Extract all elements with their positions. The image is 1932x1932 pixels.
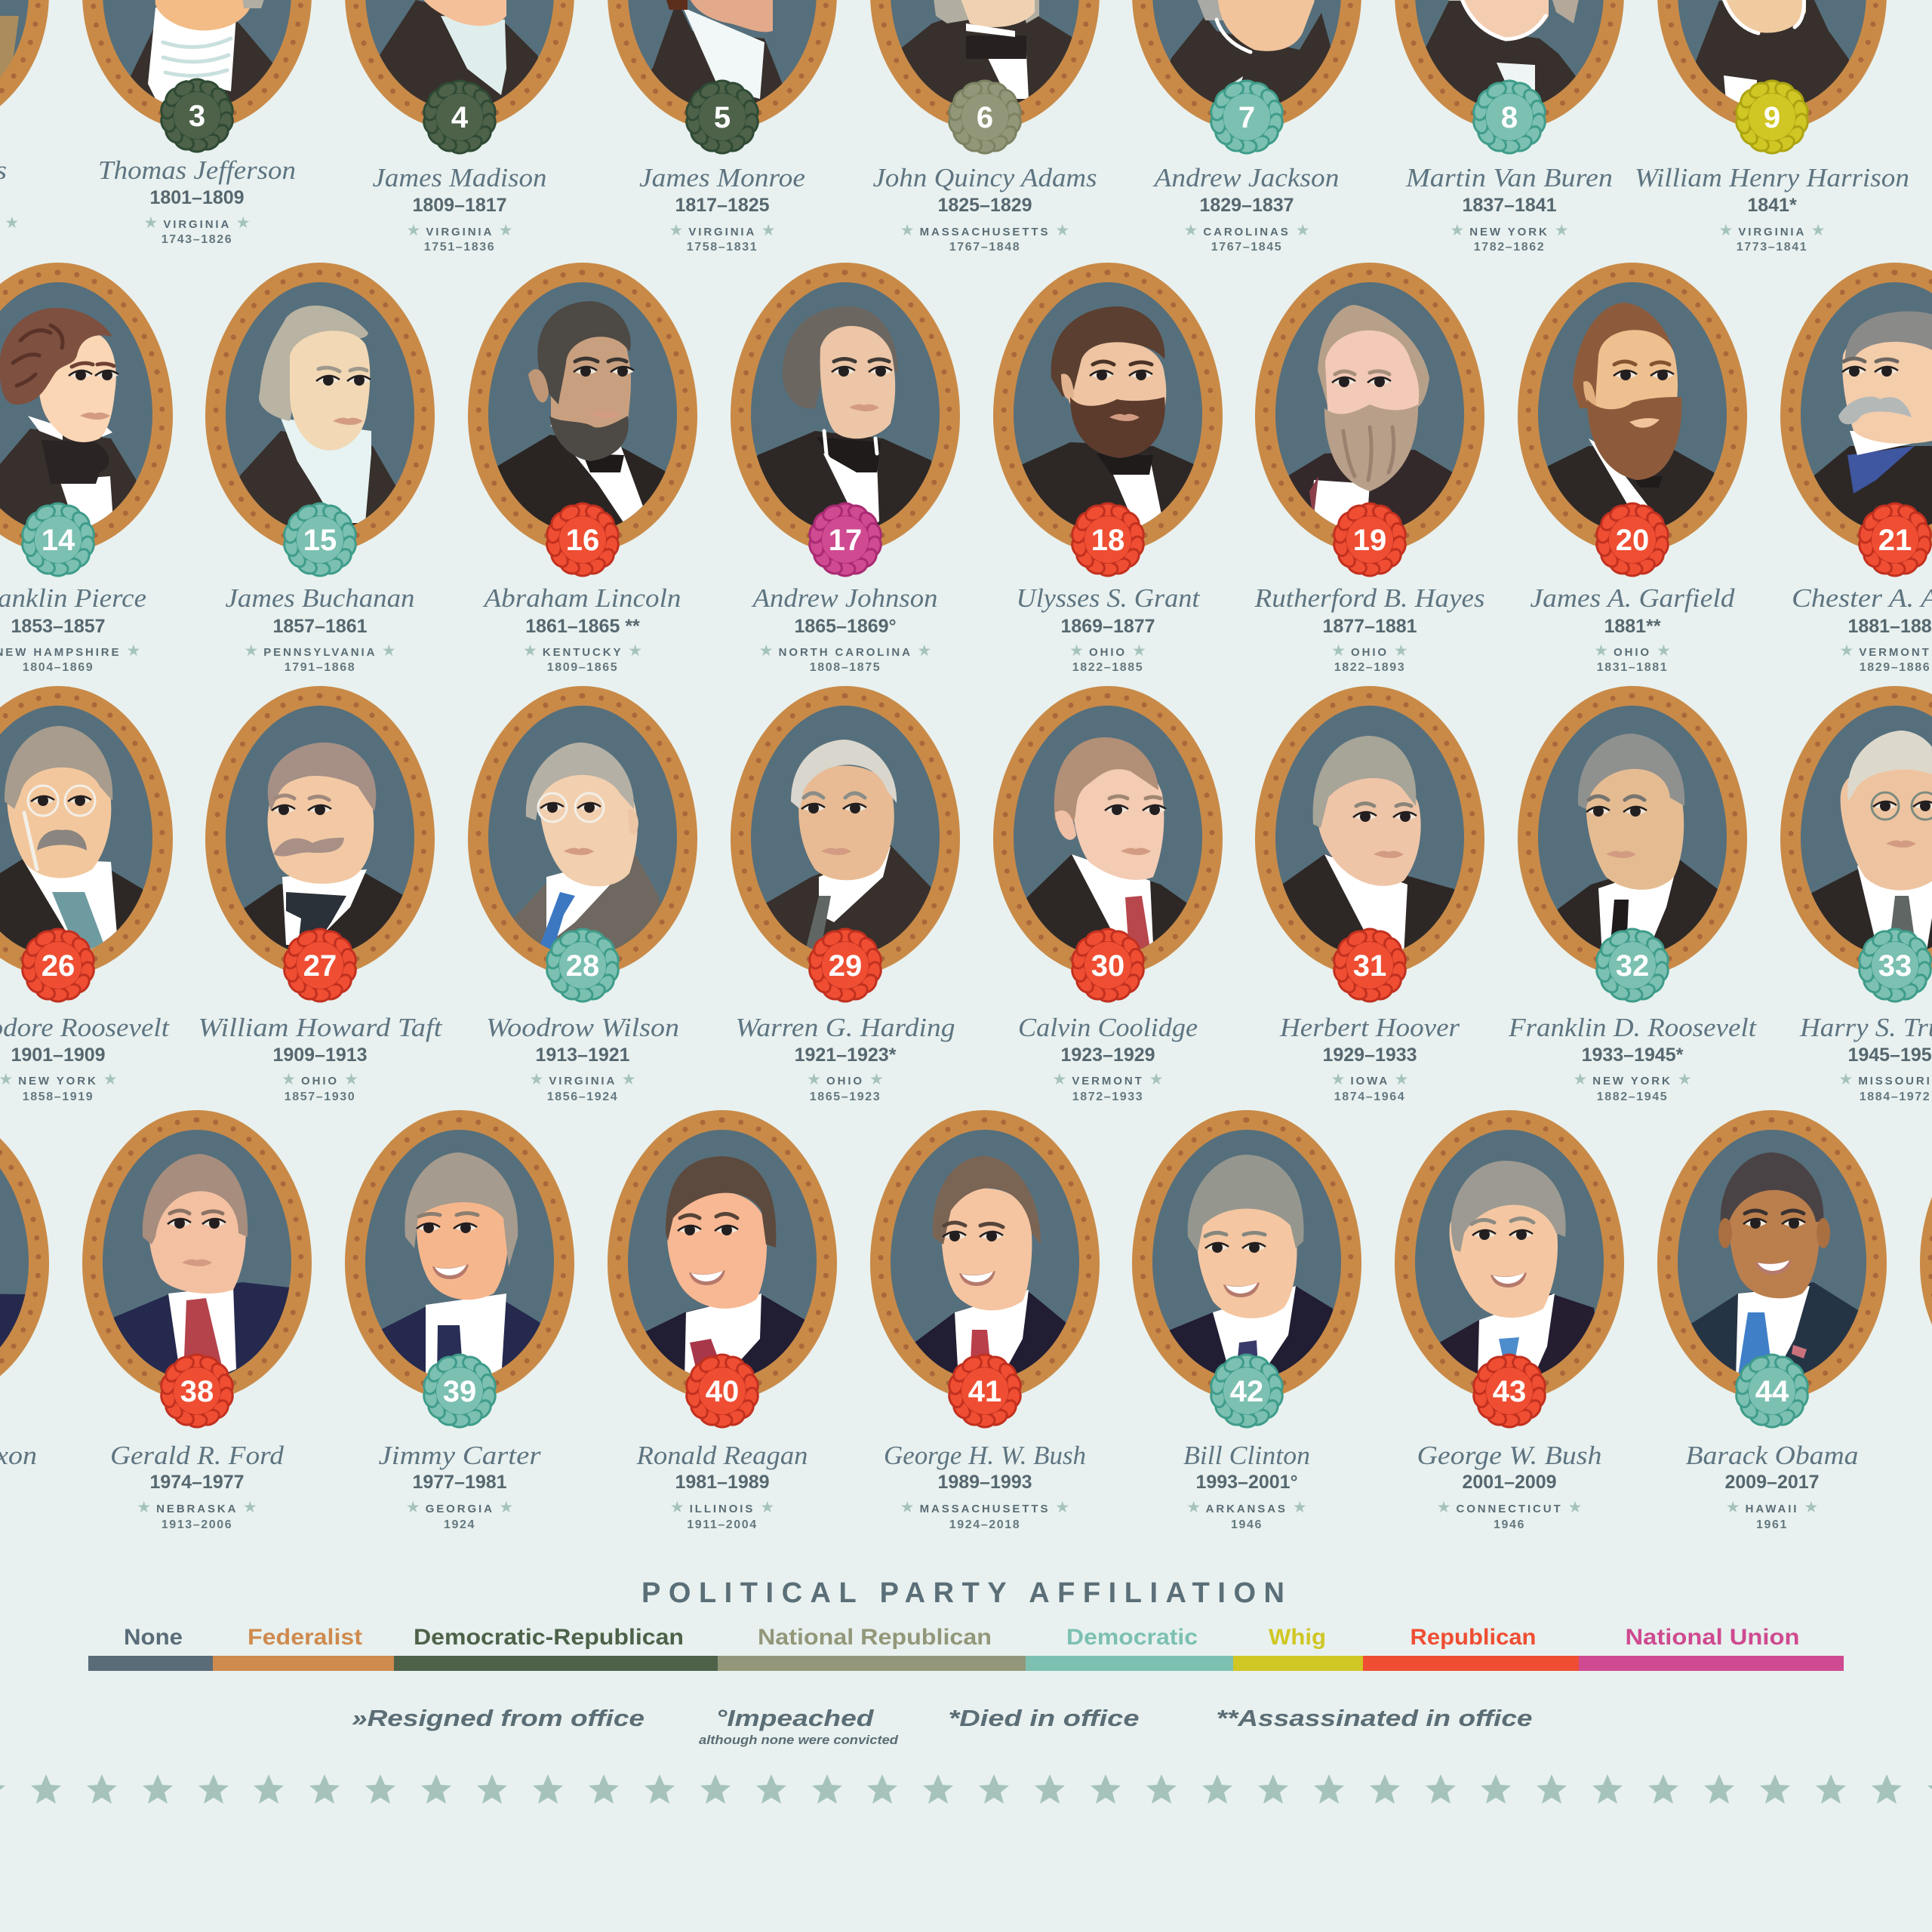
- president 15: James Buchanan: 1857–1861: [272, 616, 368, 637]
- president 17: Andrew Johnson: ★ NORTH CAROLINA ★: [759, 641, 931, 660]
- president 16: Abraham Lincoln: ★ KENTUCKY ★: [523, 641, 642, 660]
- badge 30: [1070, 928, 1146, 1002]
- badge 41: 41: [968, 1375, 1001, 1408]
- president 31: Herbert Hoover: ★ IOWA ★: [1331, 1070, 1408, 1088]
- president 31: Herbert Hoover: Herbert Hoover: [1279, 1013, 1460, 1042]
- badge 3: 3: [189, 100, 205, 133]
- president 6: John Quincy Adams: John Quincy Adams: [872, 163, 1097, 192]
- president 6: John Quincy Adams: 1825–1829: [937, 195, 1032, 216]
- president 8: Martin Van Buren: 1782–1862: [1474, 241, 1545, 254]
- badge 9: 9: [1764, 101, 1780, 134]
- badge 7: [1209, 80, 1284, 154]
- president 28: Woodrow Wilson: Woodrow Wilson: [486, 1013, 679, 1042]
- badge 16: [545, 503, 620, 577]
- president 39: Jimmy Carter: Jimmy Carter: [379, 1441, 541, 1470]
- badge 19: 19: [1353, 524, 1386, 557]
- president 39: Jimmy Carter: [345, 1110, 574, 1531]
- president 40: Ronald Reagan: [608, 1110, 837, 1531]
- president 37: Richard M. Nixon: [0, 1110, 49, 1470]
- president 18: Ulysses S. Grant: ★ OHIO ★: [1069, 641, 1146, 660]
- president 40: Ronald Reagan: 1981–1989: [675, 1472, 770, 1493]
- badge 17: [808, 503, 883, 577]
- president 27: William Howard Taft: [198, 686, 443, 1103]
- footnotes: [352, 1705, 1532, 1747]
- president 30: Calvin Coolidge: 1872–1933: [1072, 1091, 1143, 1103]
- president 40: Ronald Reagan: ★ ILLINOIS ★: [670, 1498, 774, 1516]
- president 30: Calvin Coolidge: Calvin Coolidge: [1018, 1013, 1198, 1042]
- president 8: Martin Van Buren: ★ NEW YORK ★: [1450, 221, 1569, 239]
- president 32: Franklin D. Roosevelt: [1508, 686, 1757, 1103]
- president 6: John Quincy Adams: 1767–1848: [949, 241, 1020, 254]
- president 14: Franklin Pierce: [0, 263, 173, 674]
- president 17: Andrew Johnson: 1808–1875: [810, 661, 881, 674]
- president 3: Thomas Jefferson: Thomas Jefferson: [98, 155, 296, 185]
- president 5: James Monroe: 1817–1825: [675, 195, 770, 216]
- badge 14: [20, 503, 96, 577]
- president 7: Andrew Jackson: [1132, 0, 1361, 254]
- badge 15: 15: [303, 524, 337, 557]
- badge 21: 21: [1878, 524, 1912, 557]
- president 4: James Madison: James Madison: [373, 163, 546, 192]
- portrait: [887, 1156, 1079, 1392]
- portrait: [0, 1294, 32, 1392]
- president 8: Martin Van Buren: [1395, 0, 1624, 254]
- president 33: Harry S. Truman: [1780, 686, 1932, 1103]
- president 32: Franklin D. Roosevelt: 1882–1945: [1597, 1091, 1668, 1103]
- badge 31: 31: [1353, 949, 1386, 983]
- president 44: Barack Obama: [1657, 1110, 1887, 1531]
- portrait: [1534, 734, 1727, 968]
- president 43: George W. Bush: ★ CONNECTICUT ★: [1437, 1498, 1582, 1516]
- portrait: [1547, 303, 1715, 525]
- president 14: Franklin Pierce: 1804–1869: [23, 661, 94, 674]
- badge 15: [282, 503, 358, 577]
- president 43: George W. Bush: 1946: [1494, 1518, 1525, 1531]
- badge 8: 8: [1501, 101, 1518, 134]
- note: resigned: »Resigned from office: [352, 1705, 645, 1731]
- president 18: Ulysses S. Grant: [993, 263, 1223, 674]
- president 42: Bill Clinton: 1993–2001°: [1195, 1472, 1298, 1493]
- president 40: Ronald Reagan: 1911–2004: [687, 1518, 758, 1531]
- portrait: [1797, 312, 1932, 544]
- president 9: William Henry Harrison: ★ VIRGINIA ★: [1718, 221, 1826, 239]
- president 15: James Buchanan: ★ PENNSYLVANIA ★: [244, 641, 396, 660]
- label: None: None: [124, 1625, 183, 1650]
- badge 21: [1857, 503, 1932, 577]
- note: died: *Died in office: [948, 1705, 1140, 1731]
- president 5: James Monroe: ★ VIRGINIA ★: [669, 221, 776, 239]
- president 30: Calvin Coolidge: 1923–1929: [1060, 1044, 1155, 1066]
- president 28: Woodrow Wilson: 1913–1921: [535, 1044, 630, 1066]
- president 19: Rutherford B. Hayes: [1254, 263, 1485, 674]
- portrait: [99, 1154, 291, 1392]
- president 42: Bill Clinton: 1946: [1231, 1518, 1263, 1531]
- portrait: [239, 305, 395, 525]
- president 18: Ulysses S. Grant: 1822–1885: [1072, 661, 1143, 674]
- portrait: [1170, 0, 1331, 103]
- president 4: James Madison: 1809–1817: [412, 195, 507, 216]
- president 17: Andrew Johnson: [731, 263, 960, 674]
- legend: party colours: [88, 1625, 1844, 1671]
- president 7: Andrew Jackson: Andrew Jackson: [1152, 163, 1340, 192]
- badge 9: [1734, 80, 1810, 154]
- president 32: Franklin D. Roosevelt: ★ NEW YORK ★: [1573, 1070, 1692, 1088]
- president 9: William Henry Harrison: 1841*: [1747, 195, 1797, 216]
- portrait: [1695, 0, 1849, 103]
- badge 27: 27: [303, 949, 337, 983]
- badge 42: 42: [1230, 1375, 1263, 1408]
- badge 44: 44: [1755, 1375, 1789, 1408]
- portrait: [1674, 1152, 1866, 1392]
- badge 29: [808, 928, 883, 1002]
- legend heading: POLITICAL PARTY AFFILIATION: [641, 1577, 1284, 1609]
- portrait: [747, 740, 940, 968]
- president 7: Andrew Jackson: 1767–1845: [1211, 241, 1282, 254]
- badge 32: [1595, 928, 1670, 1002]
- portrait: [1426, 0, 1579, 103]
- badge 5: [685, 80, 760, 154]
- president 18: Ulysses S. Grant: Ulysses S. Grant: [1016, 583, 1201, 613]
- president 6: John Quincy Adams: ★ MASSACHUSETTS ★: [900, 221, 1069, 239]
- president 9: William Henry Harrison: [1635, 0, 1909, 254]
- president 27: William Howard Taft: 1857–1930: [285, 1091, 355, 1103]
- badge 38: 38: [180, 1375, 214, 1408]
- president 30: Calvin Coolidge: [993, 686, 1223, 1103]
- badge 6: 6: [977, 101, 993, 134]
- note: impeached: °Impeached: [715, 1705, 875, 1731]
- president 20: James A. Garfield: 1831–1881: [1597, 661, 1668, 674]
- president 3: Thomas Jefferson: 1801–1809: [149, 187, 245, 208]
- president 42: Bill Clinton: ★ ARKANSAS ★: [1186, 1498, 1307, 1516]
- badge 14: 14: [42, 524, 75, 557]
- portrait: [361, 1152, 554, 1392]
- president 19: Rutherford B. Hayes: ★ OHIO ★: [1331, 641, 1408, 660]
- label: Democratic: Democratic: [1066, 1625, 1198, 1650]
- president 3: Thomas Jefferson: 1743–1826: [162, 233, 232, 246]
- president 21: Chester A. Arthur: 1829–1886: [1860, 661, 1930, 674]
- portrait: [0, 726, 152, 968]
- president 43: George W. Bush: [1395, 1110, 1624, 1531]
- badge 20: 20: [1616, 524, 1649, 557]
- president 8: Martin Van Buren: Martin Van Buren: [1405, 163, 1613, 192]
- row 3: presidents 26 to 33: [0, 686, 1932, 1103]
- president 3: Thomas Jefferson: ★ VIRGINIA ★: [143, 214, 251, 232]
- badge 42: [1209, 1354, 1284, 1428]
- portrait: [485, 743, 677, 968]
- president 19: Rutherford B. Hayes: 1822–1893: [1334, 661, 1405, 674]
- president 32: Franklin D. Roosevelt: 1933–1945*: [1582, 1044, 1684, 1066]
- portrait: [757, 306, 931, 525]
- president 18: Ulysses S. Grant: 1869–1877: [1060, 616, 1155, 637]
- badge 40: [685, 1354, 760, 1428]
- president 43: George W. Bush: George W. Bush: [1417, 1441, 1601, 1470]
- frame: president 45 (cropped): [1920, 1110, 1932, 1401]
- president 44: Barack Obama: 2009–2017: [1724, 1472, 1820, 1493]
- badge 31: [1332, 928, 1407, 1002]
- president 29: Warren G. Harding: 1921–1923*: [795, 1044, 897, 1066]
- president 19: Rutherford B. Hayes: Rutherford B. Hayes: [1254, 583, 1485, 613]
- badge 16: 16: [566, 524, 599, 557]
- badge 6: [947, 80, 1023, 154]
- badge 8: [1472, 80, 1547, 154]
- president 20: James A. Garfield: ★ OHIO ★: [1594, 641, 1671, 660]
- president 26: Theodore Roosevelt: ★ NEW YORK ★: [0, 1070, 118, 1088]
- president 28: Woodrow Wilson: [468, 686, 697, 1103]
- badge 43: 43: [1493, 1375, 1526, 1408]
- badge 32: 32: [1616, 949, 1649, 983]
- badge 28: [545, 928, 620, 1002]
- badge 33: 33: [1878, 949, 1912, 983]
- label: Republican: Republican: [1410, 1625, 1537, 1650]
- president 4: James Madison: 1751–1836: [424, 241, 495, 254]
- president 30: Calvin Coolidge: ★ VERMONT ★: [1052, 1070, 1164, 1088]
- president 27: William Howard Taft: ★ OHIO ★: [281, 1070, 358, 1088]
- president 33: Harry S. Truman: 1884–1972: [1860, 1091, 1930, 1103]
- badge 26: [20, 928, 96, 1002]
- badge 44: [1734, 1354, 1810, 1428]
- label: National Republican: National Republican: [758, 1625, 992, 1650]
- president 26: Theodore Roosevelt: [0, 686, 173, 1103]
- president 5: James Monroe: James Monroe: [639, 163, 805, 192]
- badge 39: [422, 1354, 497, 1428]
- badge 20: [1595, 503, 1670, 577]
- portrait: [1149, 1155, 1341, 1392]
- badge 33: [1857, 928, 1932, 1002]
- president 8: Martin Van Buren: 1837–1841: [1462, 195, 1557, 216]
- portrait: [651, 0, 782, 103]
- president 31: Herbert Hoover: 1874–1964: [1334, 1091, 1405, 1103]
- president 17: Andrew Johnson: 1865–1869°: [794, 616, 897, 637]
- president 29: Warren G. Harding: ★ OHIO ★: [807, 1070, 884, 1088]
- president 44: Barack Obama: 1961: [1756, 1518, 1788, 1531]
- president 16: Abraham Lincoln: 1809–1865: [547, 661, 618, 674]
- portrait: [131, 0, 273, 103]
- label: Democratic-Republican: Democratic-Republican: [414, 1625, 684, 1650]
- president 2: John Adams: [0, 0, 49, 246]
- badge 28: 28: [566, 949, 599, 983]
- portrait: [380, 0, 538, 103]
- president 31: Herbert Hoover: 1929–1933: [1322, 1044, 1417, 1066]
- president 14: Franklin Pierce: 1853–1857: [11, 616, 106, 637]
- president 44: Barack Obama: Barack Obama: [1686, 1441, 1858, 1470]
- badge 27: [282, 928, 358, 1002]
- badge 29: 29: [829, 949, 862, 983]
- president 5: James Monroe: [608, 0, 837, 254]
- president 27: William Howard Taft: William Howard Taft: [198, 1013, 443, 1042]
- label: Federalist: Federalist: [248, 1625, 362, 1650]
- president 16: Abraham Lincoln: Abraham Lincoln: [482, 583, 681, 613]
- president 27: William Howard Taft: 1909–1913: [272, 1044, 368, 1066]
- president 15: James Buchanan: 1791–1868: [285, 661, 355, 674]
- president 26: Theodore Roosevelt: 1858–1919: [23, 1091, 94, 1103]
- president 39: Jimmy Carter: 1977–1981: [412, 1472, 507, 1493]
- president 43: George W. Bush: 2001–2009: [1462, 1472, 1557, 1493]
- portrait: [624, 1156, 817, 1392]
- portrait: [901, 0, 1072, 103]
- portrait: [222, 743, 414, 968]
- president 20: James A. Garfield: James A. Garfield: [1531, 583, 1735, 613]
- badge 17: 17: [829, 524, 862, 557]
- president 29: Warren G. Harding: 1865–1923: [810, 1091, 881, 1103]
- president 15: James Buchanan: James Buchanan: [225, 583, 415, 613]
- president 7: Andrew Jackson: ★ CAROLINAS ★: [1183, 221, 1310, 239]
- president 29: Warren G. Harding: Warren G. Harding: [735, 1013, 955, 1042]
- president 38: Gerald R. Ford: ★ NEBRASKA ★: [137, 1498, 257, 1516]
- portrait: [1797, 731, 1932, 968]
- president 9: William Henry Harrison: 1773–1841: [1737, 241, 1807, 254]
- president 40: Ronald Reagan: Ronald Reagan: [635, 1441, 808, 1470]
- note: impeached qualifier: although none were convicted: [699, 1733, 899, 1747]
- portrait: [1272, 736, 1464, 968]
- portrait: [1022, 306, 1194, 525]
- president 41: George H. W. Bush: [870, 1110, 1100, 1531]
- president 41: George H. W. Bush: ★ MASSACHUSETTS ★: [900, 1498, 1069, 1516]
- president 38: Gerald R. Ford: Gerald R. Ford: [110, 1441, 285, 1470]
- row 1: presidents 2 to 9: [0, 0, 1909, 254]
- president 38: Gerald R. Ford: 1974–1977: [149, 1472, 245, 1493]
- badge 3: [159, 78, 235, 152]
- president 32: Franklin D. Roosevelt: Franklin D. Roosevelt: [1508, 1013, 1757, 1042]
- portrait: [1010, 737, 1202, 968]
- president 44: Barack Obama: ★ HAWAII ★: [1726, 1498, 1818, 1516]
- president 31: Herbert Hoover: [1255, 686, 1484, 1103]
- label: Whig: Whig: [1269, 1625, 1326, 1650]
- portrait: [0, 308, 136, 525]
- badge 30: 30: [1091, 949, 1124, 983]
- president 7: Andrew Jackson: 1829–1837: [1199, 195, 1294, 216]
- president 16: Abraham Lincoln: [468, 263, 697, 674]
- president 20: James A. Garfield: [1518, 263, 1747, 674]
- badge 18: 18: [1091, 524, 1124, 557]
- president 29: Warren G. Harding: [731, 686, 960, 1103]
- president 15: James Buchanan: [205, 263, 435, 674]
- badge 5: 5: [714, 101, 731, 134]
- row 2: presidents 14 to 21: [0, 263, 1932, 674]
- badge 19: [1332, 503, 1407, 577]
- badge 43: [1472, 1354, 1547, 1428]
- president 17: Andrew Johnson: Andrew Johnson: [751, 583, 937, 613]
- president 41: George H. W. Bush: 1924–2018: [949, 1518, 1020, 1531]
- president 6: John Quincy Adams: [870, 0, 1100, 254]
- portrait: [1289, 305, 1452, 525]
- badge 39: 39: [443, 1375, 476, 1408]
- star border: [0, 1774, 1932, 1804]
- badge 40: 40: [706, 1375, 739, 1408]
- president 38: Gerald R. Ford: [82, 1110, 312, 1531]
- badge 18: [1070, 503, 1146, 577]
- badge 4: 4: [451, 101, 469, 134]
- president 4: James Madison: [345, 0, 574, 254]
- president 19: Rutherford B. Hayes: 1877–1881: [1322, 616, 1417, 637]
- president 9: William Henry Harrison: William Henry Harrison: [1635, 163, 1909, 192]
- badge 4: [422, 80, 497, 154]
- portrait: [1411, 1161, 1604, 1392]
- label: National Union: National Union: [1626, 1625, 1799, 1650]
- badge 26: 26: [42, 949, 75, 983]
- president 38: Gerald R. Ford: 1913–2006: [162, 1518, 232, 1531]
- colour bar: [88, 1656, 1844, 1671]
- president 41: George H. W. Bush: George H. W. Bush: [884, 1441, 1086, 1470]
- note: assassinated: **Assassinated in office: [1217, 1705, 1532, 1731]
- badge 7: 7: [1238, 101, 1255, 134]
- badge 38: [159, 1354, 235, 1428]
- portrait: [497, 301, 666, 525]
- president 4: James Madison: ★ VIRGINIA ★: [406, 221, 513, 239]
- president 21: Chester A. Arthur: [1780, 263, 1932, 674]
- president 28: Woodrow Wilson: 1856–1924: [547, 1091, 618, 1103]
- president 28: Woodrow Wilson: ★ VIRGINIA ★: [529, 1070, 636, 1088]
- president 5: James Monroe: 1758–1831: [687, 241, 758, 254]
- president 3: Thomas Jefferson: [82, 0, 312, 246]
- president 42: Bill Clinton: [1132, 1110, 1361, 1531]
- president 16: Abraham Lincoln: 1861–1865 **: [525, 616, 640, 637]
- president 20: James A. Garfield: 1881**: [1604, 616, 1661, 637]
- president 41: George H. W. Bush: 1989–1993: [937, 1472, 1032, 1493]
- president 39: Jimmy Carter: 1924: [444, 1518, 475, 1531]
- president 42: Bill Clinton: Bill Clinton: [1183, 1441, 1310, 1470]
- row 4: presidents 37 to 45: [0, 1110, 1932, 1531]
- president 26: Theodore Roosevelt: 1901–1909: [11, 1044, 106, 1066]
- president 39: Jimmy Carter: ★ GEORGIA ★: [406, 1498, 513, 1516]
- badge 41: [947, 1354, 1023, 1428]
